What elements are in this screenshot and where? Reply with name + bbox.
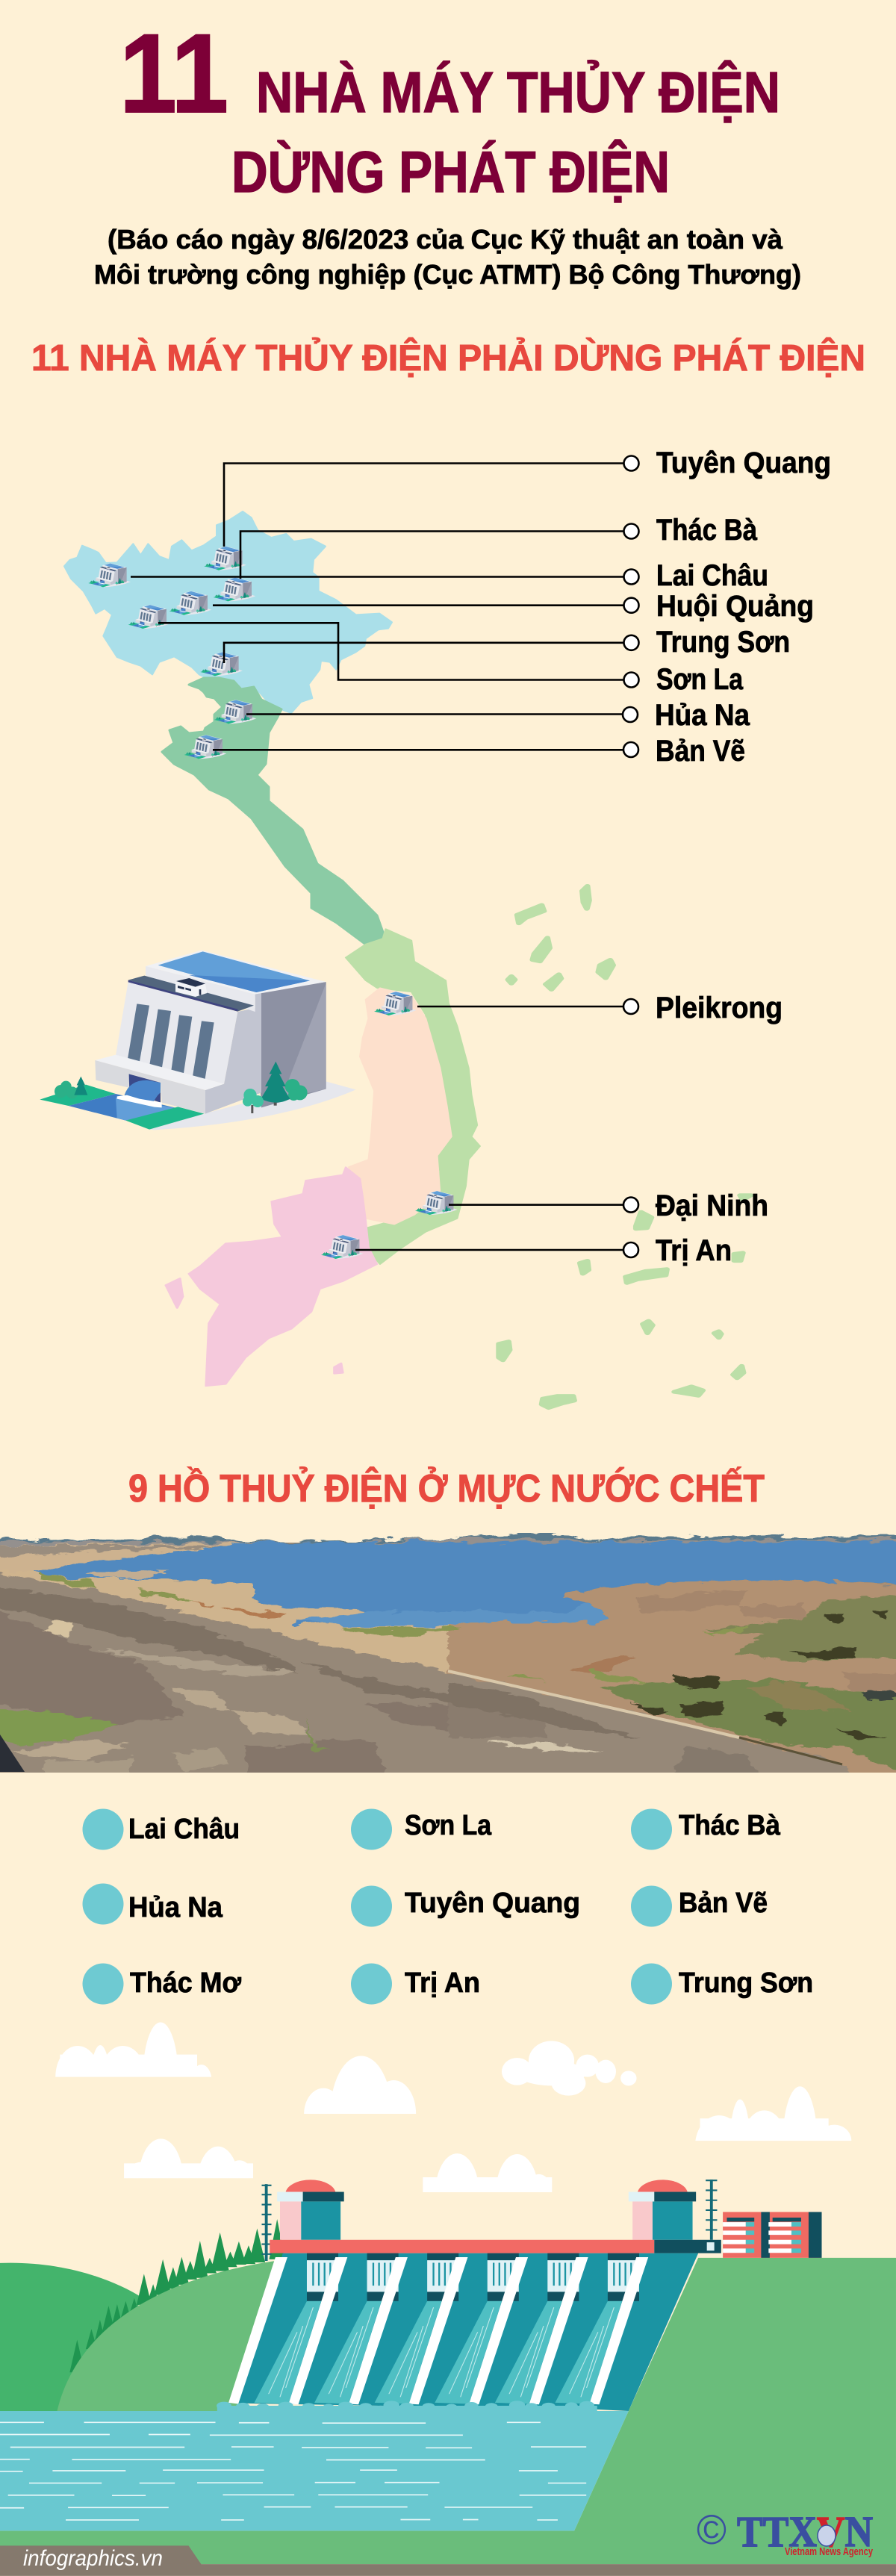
legend item: Sơn La: Sơn La xyxy=(405,1810,492,1841)
icon: plant Đại Ninh xyxy=(415,1191,458,1215)
label: Trung Sơn: Trung Sơn xyxy=(656,626,790,659)
back hill xyxy=(0,2263,143,2411)
icon: large hydropower plant xyxy=(40,951,356,1130)
subtitle: (Báo cáo ngày 8/6/2023 của Cục Kỹ thuật an toàn và xyxy=(108,224,783,255)
legend item: Thác Bà: Thác Bà xyxy=(679,1810,781,1841)
illustration: dam scene xyxy=(0,2180,896,2576)
legend item: Lai Châu: Lai Châu xyxy=(128,1814,240,1845)
leader lines xyxy=(131,463,631,1250)
label: Bản Vẽ: Bản Vẽ xyxy=(656,735,745,768)
icon: plant Tuyên Quang xyxy=(204,547,246,570)
legend item: Trị An xyxy=(351,1964,480,2004)
heading: 9 reservoirs: 9 HỒ THUỶ ĐIỆN Ở MỰC NƯỚC CHẾT xyxy=(128,1466,765,1511)
subtitle xyxy=(94,224,801,290)
legend item: Lai Châu xyxy=(82,1808,240,1850)
icon: plant Pleikrong xyxy=(374,992,417,1015)
legend item: Hủa Na xyxy=(82,1883,223,1925)
river xyxy=(0,2401,629,2530)
label: Thác Bà xyxy=(624,514,758,547)
title: 11 xyxy=(119,10,228,136)
label: Tuyên Quang: Tuyên Quang xyxy=(656,447,831,479)
icon: plant Sơn La xyxy=(128,605,170,629)
pine trees xyxy=(69,2219,285,2372)
label: Sơn La: Sơn La xyxy=(656,663,744,696)
title xyxy=(119,10,780,205)
icon: plant Trị An xyxy=(321,1235,364,1259)
label: Đại Ninh: Đại Ninh xyxy=(656,1189,768,1222)
legend: 9 reservoirs xyxy=(82,1808,813,2004)
dam deck xyxy=(270,2240,721,2253)
legend item: Tuyên Quang xyxy=(351,1886,580,1926)
map region: south east coast and highlands xyxy=(166,886,751,1408)
right tower xyxy=(629,2180,717,2240)
footer strip xyxy=(0,2545,896,2576)
title: NHÀ MÁY THỦY ĐIỆN xyxy=(256,60,780,125)
icon: plant Trung Sơn xyxy=(200,652,243,676)
clouds xyxy=(55,2022,851,2192)
label: Thác Bà: Thác Bà xyxy=(656,514,758,547)
icon: plant Bản Vẽ xyxy=(184,735,226,759)
label: Trị An: Trị An xyxy=(656,1234,732,1267)
dam body xyxy=(237,2253,698,2411)
label: Hủa Na: Hủa Na xyxy=(655,699,750,732)
legend item: Trung Sơn xyxy=(631,1964,813,2004)
legend item: Hủa Na: Hủa Na xyxy=(128,1892,223,1923)
subtitle: Môi trường công nghiệp (Cục ATMT) Bộ Công Thương) xyxy=(94,259,801,290)
logo: TTXVN: © xyxy=(697,2506,727,2553)
label: Lai Châu: Lai Châu xyxy=(656,559,768,592)
label: Bản Vẽ xyxy=(623,735,745,768)
left tower xyxy=(262,2180,344,2261)
islands xyxy=(499,886,751,1408)
legend item: Sơn La xyxy=(351,1808,492,1850)
label: Huội Quảng: Huội Quảng xyxy=(656,590,814,623)
legend item: Thác Mơ: Thác Mơ xyxy=(130,1967,242,1999)
logo: TTXVN: TTXVN xyxy=(737,2507,873,2556)
icon: plant Thác Bà xyxy=(214,577,255,601)
building xyxy=(723,2212,822,2258)
map region: north xyxy=(64,511,392,713)
legend item: Tuyên Quang: Tuyên Quang xyxy=(405,1888,580,1919)
label: Pleikrong: Pleikrong xyxy=(656,992,783,1024)
footer site name: infographics.vn xyxy=(23,2546,163,2571)
legend item: Thác Bà xyxy=(631,1808,781,1850)
legend item: Bản Vẽ xyxy=(631,1886,768,1926)
label: Trị An xyxy=(623,1234,732,1267)
photo: dried reservoir xyxy=(0,1533,896,1792)
title: DỪNG PHÁT ĐIỆN xyxy=(231,139,670,205)
icon: plant Lai Châu xyxy=(88,563,131,587)
legend item: Trung Sơn: Trung Sơn xyxy=(679,1967,813,1999)
legend item: Thác Mơ xyxy=(82,1964,242,2004)
map of Vietnam xyxy=(64,511,751,1408)
label: Sơn La xyxy=(624,663,744,696)
icon: plant Huội Quảng xyxy=(169,591,211,615)
map region: north central xyxy=(162,678,385,945)
legend item: Trị An: Trị An xyxy=(405,1967,480,1999)
heading: 11 plants: 11 NHÀ MÁY THỦY ĐIỆN PHẢI DỪNG PHÁT ĐIỆN xyxy=(31,337,865,379)
legend item: Bản Vẽ: Bản Vẽ xyxy=(679,1888,768,1919)
land xyxy=(0,2258,896,2564)
icon: plant Hủa Na xyxy=(214,700,256,724)
